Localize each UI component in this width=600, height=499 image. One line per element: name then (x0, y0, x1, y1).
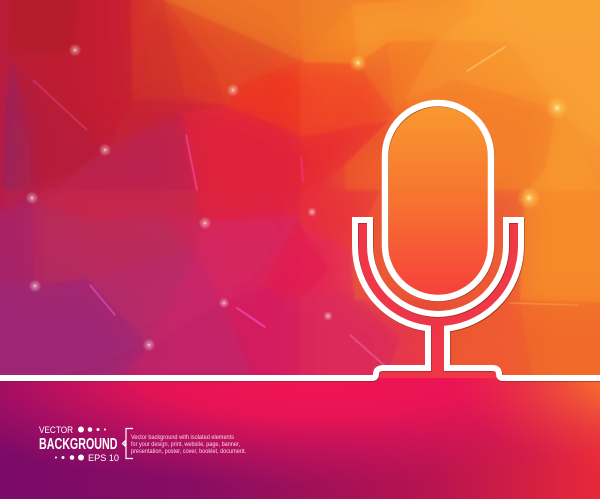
background label: BACKGROUND (39, 436, 118, 453)
vector label: VECTOR (39, 425, 73, 436)
light streaks (33, 47, 578, 366)
description text: for your design, print, website, page, banner, (131, 441, 240, 448)
logo block (39, 425, 119, 464)
sparkles (26, 44, 569, 352)
description text: Vector background with isolated elements (131, 434, 234, 441)
description text: presentation, poster, cover, booklet, document. (131, 448, 246, 455)
bottom dots (55, 454, 84, 460)
icon: microphone (0, 103, 600, 379)
description text (131, 434, 246, 455)
bottom colour band (0, 378, 600, 499)
microphone capsule fill (385, 103, 491, 298)
eps label: EPS 10 (88, 453, 119, 464)
microphone stand and ground line (0, 220, 600, 378)
microphone outline shadow (1, 104, 600, 379)
bracket (122, 428, 133, 458)
top dots (78, 426, 106, 432)
microphone capsule outline (385, 103, 491, 298)
microphone stand band fill (355, 220, 521, 378)
